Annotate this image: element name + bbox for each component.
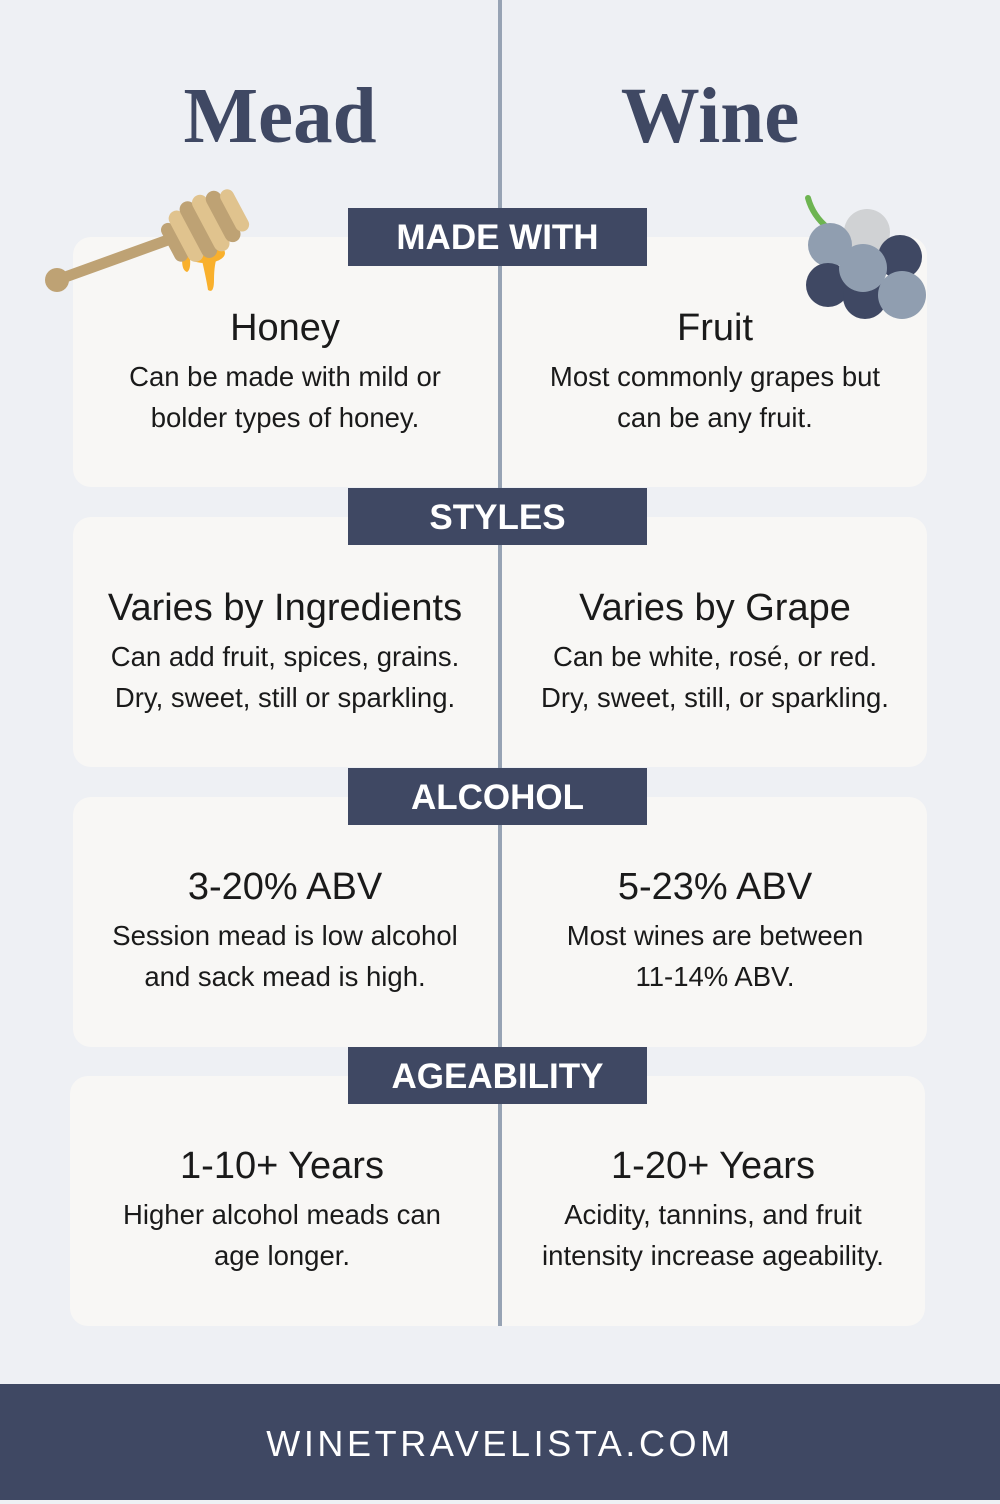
text: mead styles [108,587,462,713]
text: wine alcohol [567,866,863,992]
header: styles [348,488,647,545]
text: mead age: Higher alcohol meads can [123,1199,441,1230]
text: wine age: 1-20+ Years [611,1145,815,1187]
text: mead styles: Can add fruit, spices, grains. [111,641,459,672]
text: mead alcohol [112,866,458,992]
text: wine alcohol: Most wines are between [567,920,863,951]
footer [0,1384,1000,1500]
text: mead styles: Varies by Ingredients [108,587,462,629]
text: wine styles [541,587,889,713]
text: fruit [550,307,880,433]
text: fruit: can be any fruit. [617,402,813,433]
text: fruit: Most commonly grapes but [550,361,880,392]
text: wine age [542,1145,884,1271]
text: mead alcohol: Session mead is low alcohol [112,920,458,951]
text: wine age: Acidity, tannins, and fruit [564,1199,862,1230]
text: wine styles: Varies by Grape [579,587,851,629]
title: Wine: Wine [621,73,799,160]
text: mead alcohol: and sack mead is high. [144,961,426,992]
text: honey: Honey [230,307,340,349]
text: honey [129,307,441,433]
panel: styles [73,517,927,767]
text: honey: bolder types of honey. [151,402,419,433]
text: fruit: Fruit [677,307,753,349]
text: mead age [123,1145,441,1271]
text: mead styles: Dry, sweet, still or sparkling. [115,682,455,713]
panel: ageability [70,1076,925,1326]
text: mead alcohol: 3-20% ABV [188,866,382,908]
header: ageability: AGEABILITY [392,1057,603,1096]
icon: grapes [805,195,926,319]
panel: made with [73,237,927,487]
text: mead age: 1-10+ Years [180,1145,384,1187]
panel: alcohol [73,797,927,1047]
header: ageability [348,1047,647,1104]
header: made with [348,208,647,266]
text: wine alcohol: 5-23% ABV [618,866,812,908]
icon: honey dipper [45,189,250,292]
text: mead age: age longer. [214,1240,350,1271]
text: wine styles: Dry, sweet, still, or sparkling. [541,682,889,713]
title: Mead: Mead [183,73,377,160]
text: wine styles: Can be white, rosé, or red. [553,641,877,672]
text: wine alcohol: 11-14% ABV. [635,961,794,992]
header: styles: STYLES [429,498,566,537]
header: alcohol [348,768,647,825]
text: wine age: intensity increase ageability. [542,1240,884,1271]
footer: WINETRAVELISTA.COM [266,1423,734,1464]
text: honey: Can be made with mild or [129,361,441,392]
header: alcohol: ALCOHOL [411,778,584,817]
header: made with: MADE WITH [396,218,599,257]
divider line [498,0,502,1326]
